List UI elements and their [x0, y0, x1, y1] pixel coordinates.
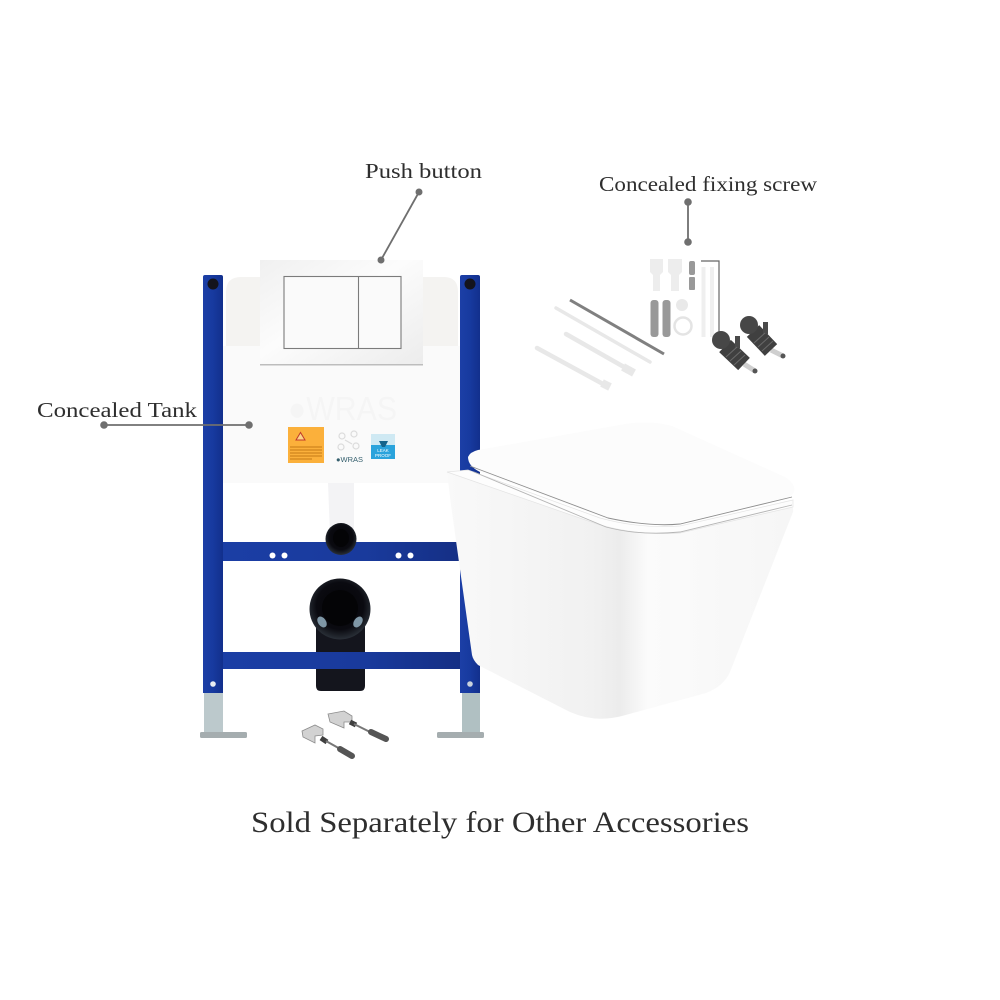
label: concealed fixing screw: Concealed fixing screw — [599, 172, 818, 196]
toilet — [447, 422, 794, 719]
panel: concealed tank frame — [200, 275, 484, 738]
dark bolt rear — [740, 316, 786, 358]
leader: push button — [378, 188, 422, 264]
concealed fixing screw kit — [537, 259, 786, 387]
grey sleeves — [650, 300, 670, 337]
upper pipe socket — [326, 523, 356, 555]
toilet seat lid — [468, 422, 794, 524]
frame lower crossbar — [223, 652, 460, 669]
seat shadow lines — [470, 466, 792, 533]
frame right post — [460, 275, 480, 693]
frame left post — [203, 275, 223, 693]
label: concealed fixing screw — [599, 172, 818, 246]
dark bolt front — [712, 331, 758, 374]
tank body — [223, 277, 460, 483]
label: concealed tank: Concealed Tank — [37, 398, 198, 422]
foot left — [200, 693, 247, 738]
leader: concealed tank — [100, 421, 253, 429]
leader: fixing screw — [684, 198, 692, 246]
anchor lower — [302, 725, 352, 756]
lower outlet bend — [310, 578, 370, 691]
label: concealed tank — [37, 398, 253, 429]
icon: leak proof badge: LEAK — [377, 448, 389, 453]
plastic plates — [650, 259, 682, 291]
white rods vertical — [702, 267, 714, 337]
foot right — [437, 693, 484, 738]
waste pipe white — [328, 483, 354, 535]
tank watermark logo: ●WRAS — [288, 390, 397, 427]
wall anchor bolts — [302, 711, 386, 756]
push button plate — [260, 260, 423, 366]
icon: wras certification — [336, 431, 363, 464]
bowl rim — [447, 470, 793, 534]
white rods angled — [537, 308, 650, 387]
small grey sleeves — [689, 261, 695, 290]
label: push button — [365, 159, 483, 264]
icon: warning sticker — [288, 427, 324, 463]
long metal rod — [570, 300, 664, 354]
icon: leak proof badge — [371, 434, 395, 459]
icon: leak proof badge: PROOF — [375, 453, 391, 458]
frame upper crossbar — [223, 542, 460, 561]
toilet bowl — [447, 472, 793, 719]
label: push button: Push button — [365, 159, 483, 183]
allen key — [701, 261, 719, 333]
anchor upper — [328, 711, 386, 739]
icon: wras certification: ●WRAS — [336, 455, 363, 464]
disc and ring — [674, 299, 692, 334]
caption: Sold Separately for Other Accessories — [251, 806, 749, 839]
